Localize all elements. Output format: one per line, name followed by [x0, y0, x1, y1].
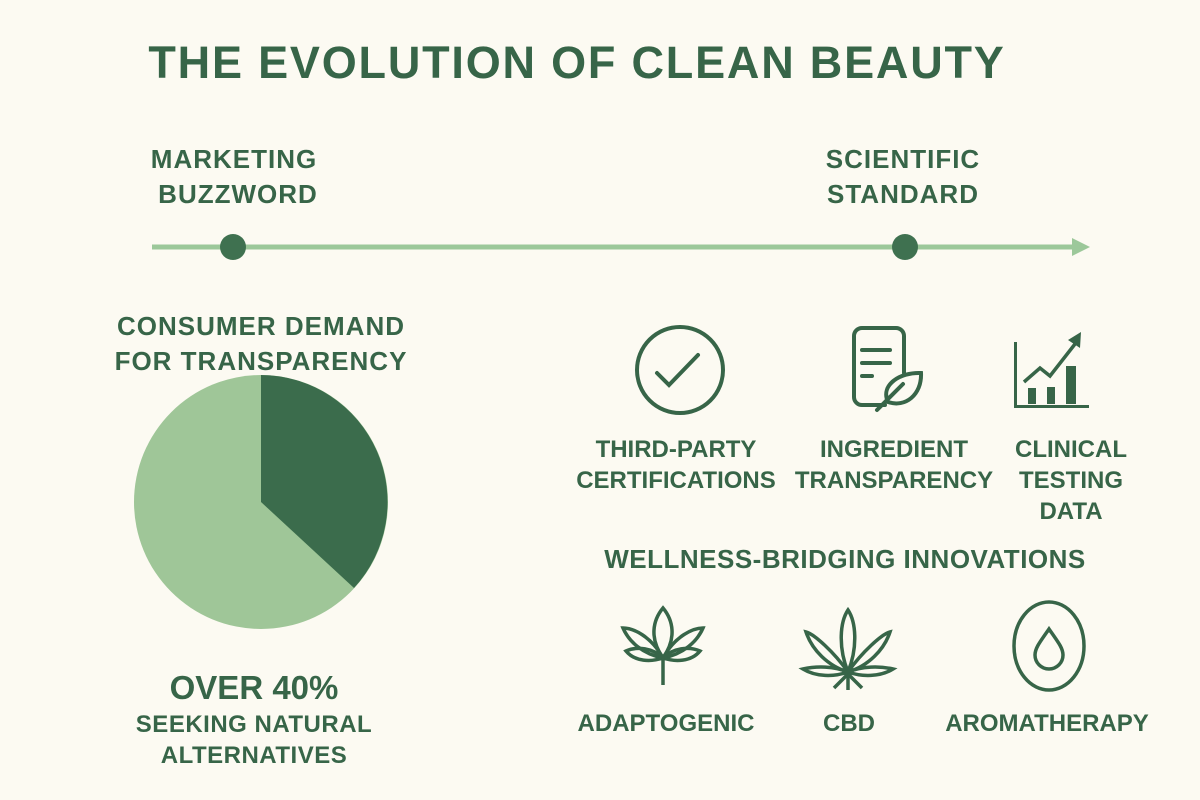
- heading: wellness-bridging innovations: WELLNESS-BRIDGING INNOVATIONS: [604, 544, 1086, 574]
- timeline label: scientific standard: STANDARD: [827, 179, 979, 209]
- heading: consumer demand: [115, 311, 407, 376]
- stat: over 40%: ALTERNATIVES: [161, 742, 347, 769]
- timeline label: marketing buzzword: BUZZWORD: [158, 179, 318, 209]
- label: ingredient transparency: TRANSPARENCY: [795, 467, 993, 494]
- icon: aromatherapy drop: [1014, 602, 1084, 690]
- timeline label: marketing buzzword: MARKETING: [151, 144, 317, 174]
- label: third-party certifications: THIRD-PARTY: [596, 436, 756, 463]
- label: clinical testing data: DATA: [1039, 498, 1103, 525]
- label: clinical testing data: TESTING: [1019, 467, 1123, 494]
- label: clinical testing data: [1015, 436, 1127, 525]
- label: clinical testing data: CLINICAL: [1015, 436, 1127, 463]
- label: ingredient transparency: [795, 436, 993, 494]
- label: cbd: CBD: [823, 710, 875, 737]
- icon: adaptogenic leaf: [623, 608, 703, 685]
- label: third-party certifications: [576, 436, 776, 494]
- label: adaptogenic: ADAPTOGENIC: [578, 710, 754, 737]
- stat: over 40%: [136, 669, 372, 769]
- label: ingredient transparency: INGREDIENT: [820, 436, 968, 463]
- icon: bar chart: [1014, 332, 1089, 408]
- icon: document leaf: [854, 328, 921, 410]
- label: aromatherapy: AROMATHERAPY: [945, 710, 1149, 737]
- pie chart: [134, 375, 388, 629]
- heading: consumer demand: CONSUMER DEMAND: [117, 311, 405, 341]
- title: THE EVOLUTION OF CLEAN BEAUTY: [148, 37, 1006, 88]
- timeline arrow: [152, 234, 1090, 260]
- stat: over 40%: SEEKING NATURAL: [136, 711, 372, 738]
- stat: over 40%: OVER 40%: [170, 669, 338, 706]
- heading: consumer demand: FOR TRANSPARENCY: [115, 346, 407, 376]
- timeline label: scientific standard: SCIENTIFIC: [826, 144, 980, 174]
- icon: cbd leaf: [803, 610, 893, 690]
- label: third-party certifications: CERTIFICATIONS: [576, 467, 776, 494]
- timeline label: scientific standard: [826, 144, 980, 209]
- icon: check circle: [637, 327, 723, 413]
- timeline label: marketing buzzword: [151, 144, 318, 209]
